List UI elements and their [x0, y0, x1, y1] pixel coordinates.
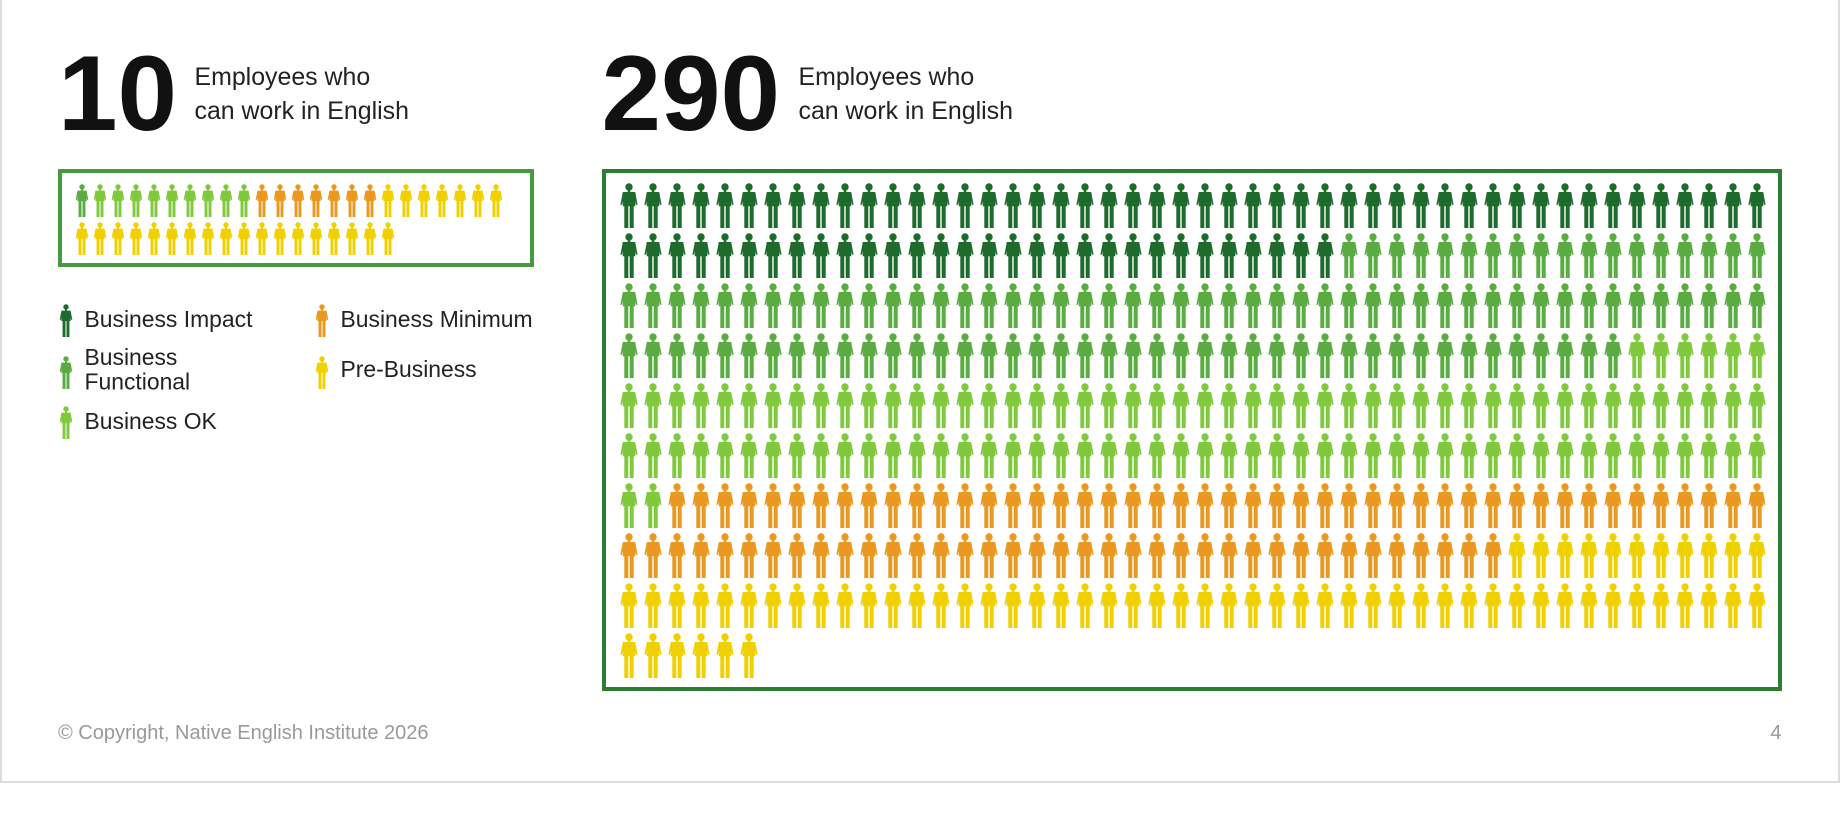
pre-business figures [620, 533, 1766, 678]
chart frame [60, 171, 532, 265]
legend item: Business Functional [60, 344, 190, 394]
caption: employees who can work in English: Employees who [194, 63, 370, 91]
business ok figures [94, 184, 250, 217]
pre-business figures [76, 184, 502, 255]
legend item: Business Impact: Business Impact [84, 306, 253, 332]
chart frame [604, 171, 1780, 689]
panel: 290 employees heading [602, 33, 1013, 153]
business ok figures [620, 333, 1766, 528]
big number 290: 290 [602, 33, 780, 153]
legend item: Pre-Business: Pre-Business [340, 356, 477, 382]
legend item: Business Functional: Business [84, 344, 177, 370]
caption: employees who can work in English: can work in English [798, 97, 1013, 125]
panel: large pictogram chart [604, 171, 1780, 689]
business minimum figures [620, 483, 1766, 578]
legend [60, 304, 533, 439]
legend item: Business Functional: Functional [84, 368, 190, 394]
business functional figure [76, 184, 88, 217]
legend item: Business OK [60, 406, 218, 439]
caption: employees who can work in English: Employees who [798, 63, 974, 91]
legend item: Business OK: Business OK [84, 408, 218, 434]
panel: 10 employees heading [58, 33, 409, 153]
business minimum figures [256, 184, 376, 217]
panel: small pictogram chart [60, 171, 532, 265]
caption: employees who can work in English: can work in English [194, 97, 409, 125]
business functional figures [620, 233, 1766, 378]
legend item: Business Minimum: Business Minimum [340, 306, 533, 332]
legend item: Pre-Business [316, 356, 477, 389]
big number 10: 10 [58, 33, 177, 153]
business impact figures [620, 183, 1766, 278]
caption: employees who can work in English [798, 63, 1013, 125]
legend item: Business Impact [60, 304, 253, 337]
footer copyright: © Copyright, Native English Institute 2026 [58, 722, 428, 744]
page number: 4 [1770, 722, 1782, 744]
caption: employees who can work in English [194, 63, 409, 125]
